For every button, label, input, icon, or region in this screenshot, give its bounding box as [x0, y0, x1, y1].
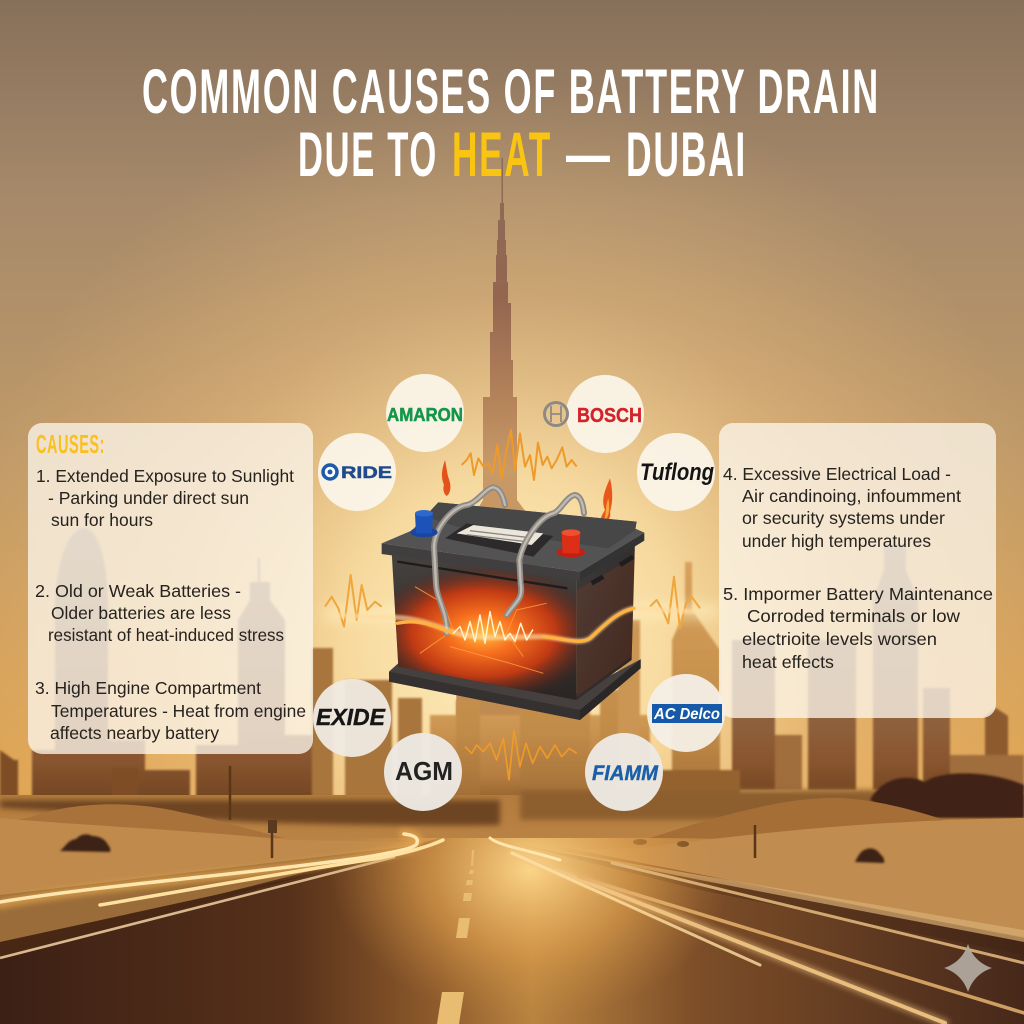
battery handles — [434, 487, 584, 633]
badge: AGM — [384, 733, 462, 811]
panel: causes left — [28, 423, 313, 754]
badge: Bosch: BOSCH — [577, 404, 642, 427]
flames above battery — [442, 460, 612, 525]
badge: AGM: AGM — [395, 756, 453, 786]
background: Burj Khalifa tower — [456, 158, 548, 720]
terminal: negative blue — [410, 510, 438, 537]
battery lid — [382, 502, 644, 581]
title: HEAT — [452, 120, 552, 190]
title: DUE TO — [298, 120, 438, 190]
title: — — [566, 120, 612, 190]
badge: Tuflong: Tuflong — [640, 459, 714, 486]
text: cause 1: - Parking under direct sun — [48, 488, 249, 508]
panel: causes right — [719, 423, 996, 718]
text: cause 4: 4. Excessive Electrical Load - — [723, 464, 951, 484]
text: cause 3: 3. High Engine Compartment — [35, 678, 261, 698]
text: cause 5: 5. Impormer Battery Maintenance — [723, 584, 993, 604]
heat waves around battery — [325, 430, 700, 780]
badge: AC Delco: AC Delco — [653, 706, 720, 723]
badge: Ride — [318, 433, 396, 511]
text: cause 4: or security systems under — [742, 508, 945, 528]
text: cause 3: Temperatures - Heat from engine — [51, 701, 306, 721]
badge: Fiamm: FIAMM — [592, 762, 658, 785]
heat light streak behind battery — [325, 605, 720, 620]
text: cause 2 — [35, 581, 284, 645]
badge: Exide: EXIDE — [316, 704, 386, 730]
terminal: positive red — [557, 529, 585, 557]
text: cause 2: Older batteries are less — [51, 603, 231, 623]
battery base — [389, 659, 641, 720]
text: cause 1: 1. Extended Exposure to Sunlight — [36, 466, 294, 486]
text: cause 3: affects nearby battery — [50, 723, 219, 743]
text: cause 2: resistant of heat-induced stress — [48, 625, 284, 645]
text: cause 1 — [36, 466, 294, 530]
road centre dashes — [437, 850, 474, 1024]
badge: AC Delco — [647, 674, 725, 752]
glowing current line — [330, 608, 693, 643]
text: cause 5 — [723, 584, 993, 672]
text: cause 5: heat effects — [742, 652, 834, 672]
title: DUBAI — [626, 120, 747, 190]
right light trails — [490, 838, 1024, 1023]
text: cause 4: under high temperatures — [742, 531, 931, 551]
battery body — [392, 542, 635, 700]
left light trails — [0, 834, 443, 905]
text: cause 5: electrioite levels worsen — [742, 629, 937, 649]
title — [142, 57, 880, 190]
badge: Tuflong — [637, 433, 715, 511]
road edge line left — [0, 857, 395, 958]
battery label — [445, 523, 553, 557]
badge: Bosch — [544, 375, 644, 453]
brand badges — [313, 374, 725, 811]
watermark sparkle icon — [944, 944, 992, 992]
background: desert dunes and tree line — [0, 766, 1024, 1024]
badge: Exide — [313, 679, 391, 757]
text: cause 1: sun for hours — [51, 510, 153, 530]
badge: Amaron — [386, 374, 464, 452]
battery — [330, 487, 693, 720]
badge: Amaron: AMARON — [387, 405, 463, 425]
text: cause 4 — [723, 464, 961, 551]
background: Dubai skyline buildings — [0, 528, 1024, 800]
text: cause 2: 2. Old or Weak Batteries - — [35, 581, 241, 601]
text: cause 5: Corroded terminals or low — [747, 606, 960, 626]
badge: Ride: RIDE — [341, 463, 392, 482]
text: cause 4: Air candinoing, infoumment — [742, 486, 961, 506]
road — [0, 834, 1024, 1024]
heading: causes: CAUSES: — [36, 429, 105, 459]
text: cause 3 — [35, 678, 306, 743]
badge: Fiamm — [585, 733, 663, 811]
